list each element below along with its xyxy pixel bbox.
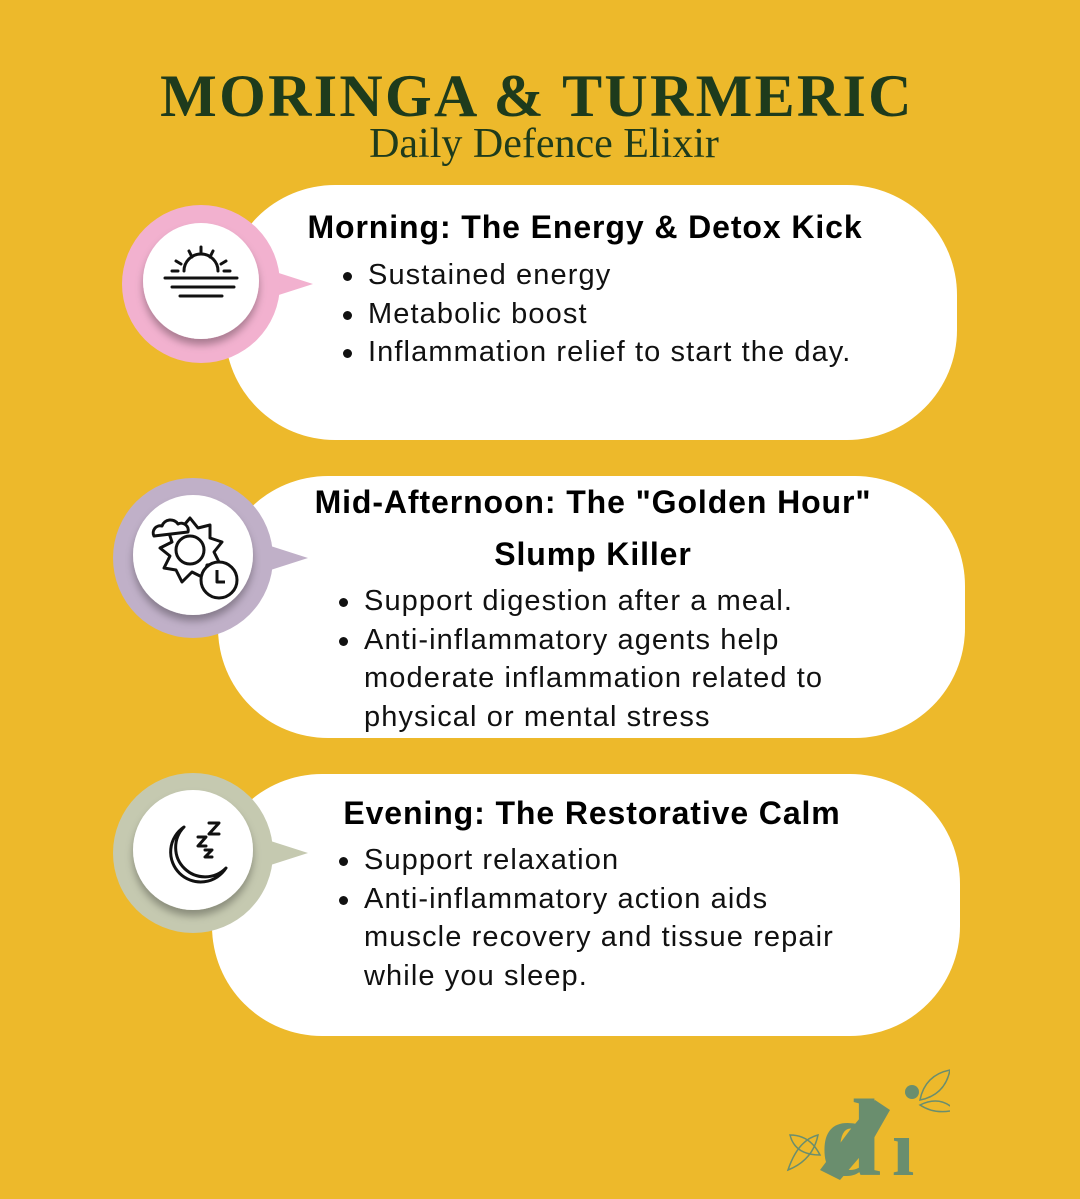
- bullets: evening: Support relaxation: [364, 844, 619, 876]
- icon: evening moon badge: [113, 773, 308, 933]
- heading: afternoon: [315, 484, 871, 572]
- bullets: morning: Metabolic boost: [368, 298, 588, 330]
- heading: afternoon: Mid-Afternoon: The "Golden Hour": [315, 484, 871, 520]
- panel: afternoon card: [218, 476, 965, 738]
- panel: morning card: [225, 185, 957, 440]
- bullets: evening: while you sleep.: [364, 960, 588, 992]
- bullets: afternoon: Support digestion after a meal.: [364, 585, 793, 617]
- bullets: evening: [339, 844, 834, 992]
- bullets: afternoon: [339, 585, 823, 732]
- bullets: afternoon: physical or mental stress: [364, 700, 711, 732]
- icon: afternoon sun clock badge: [113, 478, 308, 638]
- heading: afternoon: Slump Killer: [494, 536, 692, 572]
- icon: morning sunrise badge: [122, 205, 313, 363]
- bullets: morning: Sustained energy: [368, 259, 611, 291]
- bullets: evening: muscle recovery and tissue repair: [364, 921, 834, 953]
- logo: turmeric di mark: [786, 1069, 950, 1190]
- heading: evening: Evening: The Restorative Calm: [343, 795, 841, 831]
- bullets: morning: Inflammation relief to start the day.: [368, 336, 851, 368]
- bullets: afternoon: moderate inflammation related to: [364, 662, 823, 694]
- subtitle: Daily Defence Elixir: [369, 121, 719, 167]
- bullets: morning: [343, 259, 851, 368]
- title: MORINGA & TURMERIC: [160, 63, 914, 129]
- heading: morning: Morning: The Energy & Detox Kick: [307, 209, 863, 245]
- bullets: evening: Anti-inflammatory action aids: [364, 882, 768, 914]
- panel: evening card: [212, 774, 960, 1036]
- bullets: afternoon: Anti-inflammatory agents help: [364, 624, 780, 656]
